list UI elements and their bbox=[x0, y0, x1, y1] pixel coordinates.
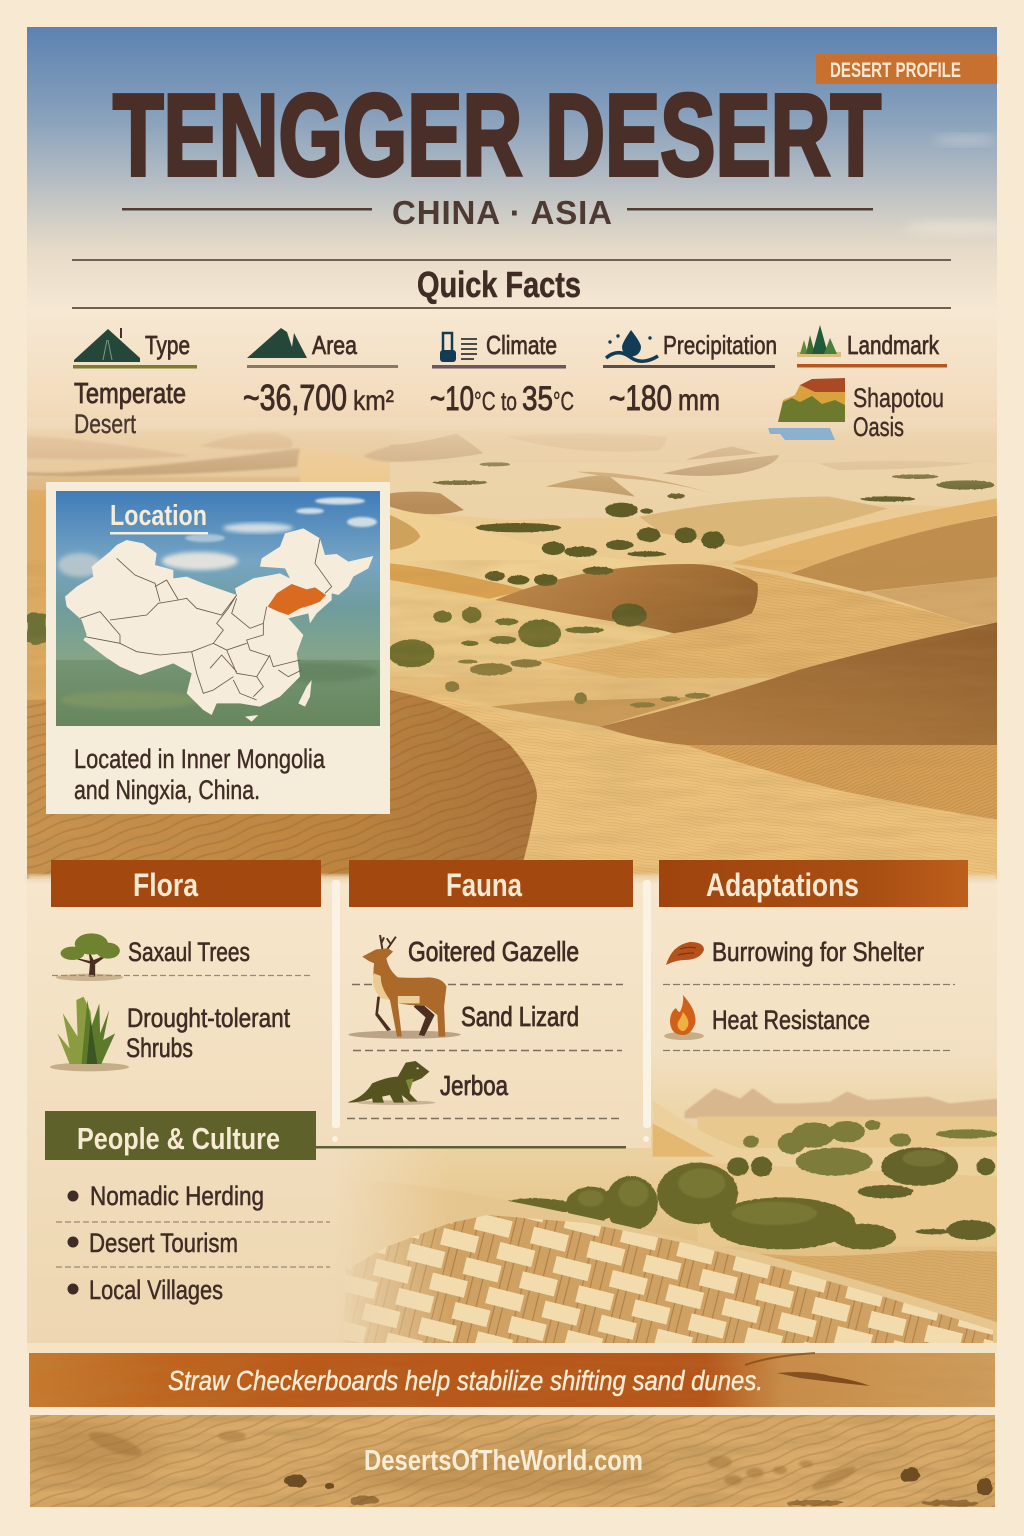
sky and haze backdrop bbox=[27, 27, 1015, 457]
badge: desert profile bbox=[816, 54, 997, 84]
straw checkerboard bbox=[343, 1215, 993, 1343]
panel: location: and Ningxia, China. bbox=[74, 775, 260, 805]
list: culture items: Nomadic Herding bbox=[90, 1181, 264, 1211]
panel: fauna: Fauna bbox=[446, 867, 522, 903]
fact: climate: 35 bbox=[522, 380, 553, 418]
panel: adaptations: Burrowing for Shelter bbox=[712, 937, 924, 967]
lower left dark dune bbox=[27, 690, 537, 880]
divider bars bbox=[332, 880, 651, 1142]
panel: fauna: Sand Lizard bbox=[461, 1001, 579, 1032]
lower panels backdrop bbox=[27, 875, 997, 1349]
fact: type bbox=[73, 328, 197, 439]
list: culture items: Desert Tourism bbox=[89, 1228, 238, 1258]
bush highlights bbox=[578, 1150, 945, 1225]
trees and bushes bbox=[497, 1120, 997, 1249]
subtitle: CHINA · ASIA bbox=[392, 194, 612, 231]
lower right landscape with checkerboard bbox=[344, 1074, 997, 1343]
icon: flame bbox=[664, 995, 704, 1040]
fact: landmark: Landmark bbox=[847, 330, 940, 360]
shrubs scattered bbox=[388, 462, 995, 708]
fact: type: Desert bbox=[74, 409, 136, 439]
panel: fauna: Jerboa bbox=[440, 1070, 508, 1101]
list: culture items bbox=[56, 1181, 330, 1305]
fact: precipitation bbox=[603, 330, 777, 418]
icon: shrub bbox=[50, 997, 129, 1071]
panel: location bbox=[46, 482, 390, 814]
icon: burrow bbox=[666, 942, 704, 965]
heading: quick facts: Quick Facts bbox=[417, 264, 581, 305]
icon: gazelle bbox=[348, 935, 461, 1039]
fact: area: ~36,700 bbox=[243, 377, 347, 418]
icon: saxaul tree bbox=[56, 933, 123, 981]
panel: adaptations: Adaptations bbox=[706, 867, 859, 903]
traced right dunes bbox=[386, 430, 1001, 880]
caption: straw checkerboards: Straw Checkerboards help stabilize shifting sand dunes. bbox=[168, 1365, 763, 1396]
footer: website: DesertsOfTheWorld.com bbox=[364, 1445, 643, 1477]
panel: people and culture: People & Culture bbox=[77, 1121, 280, 1156]
fact: precipitation: ~180 bbox=[609, 379, 672, 418]
fact: climate bbox=[430, 330, 574, 418]
fact: area: Area bbox=[312, 330, 357, 360]
fact: landmark: Oasis bbox=[853, 412, 904, 442]
fact: area bbox=[243, 328, 398, 418]
distant haze overlay bbox=[27, 418, 997, 505]
fact: climate: ~10 bbox=[430, 380, 474, 418]
icon: thermometer bbox=[440, 333, 477, 362]
icon: jerboa bbox=[348, 1061, 435, 1105]
fact: type: Type bbox=[145, 330, 190, 360]
sand grain texture bbox=[27, 560, 997, 880]
fact: climate: Climate bbox=[486, 330, 557, 360]
panel: location: Located in Inner Mongolia bbox=[74, 744, 326, 774]
panel: flora: Shrubs bbox=[126, 1033, 193, 1063]
fact: area: km² bbox=[353, 385, 394, 416]
left distant dunes bbox=[27, 432, 390, 490]
panel: fauna: Goitered Gazelle bbox=[408, 936, 579, 967]
foreground dune bbox=[496, 1200, 997, 1343]
fact: climate: °C bbox=[553, 386, 574, 416]
fact: precipitation: mm bbox=[678, 384, 720, 417]
icon: water drop and wave bbox=[606, 330, 658, 361]
icon: oasis bbox=[768, 378, 845, 440]
icon: tent bbox=[74, 328, 140, 362]
panel: flora bbox=[50, 860, 321, 1071]
orange caption band background bbox=[27, 1343, 997, 1407]
panel: adaptations: Heat Resistance bbox=[712, 1005, 870, 1035]
panel: adaptations bbox=[659, 860, 968, 1050]
list: culture items: Local Villages bbox=[89, 1275, 223, 1305]
fact: landmark: Shapotou bbox=[853, 383, 944, 413]
panel: location: Location bbox=[110, 500, 207, 532]
hero dunes landscape bbox=[20, 418, 1001, 880]
footer sand background bbox=[20, 1415, 995, 1507]
panel: flora: Flora bbox=[133, 867, 198, 903]
panel: flora: Drought-tolerant bbox=[127, 1003, 290, 1033]
icon: grass bbox=[797, 325, 841, 357]
icon: mountain bbox=[247, 328, 307, 358]
fact: climate: °C to bbox=[474, 386, 517, 416]
map of China bbox=[65, 528, 373, 722]
fact: precipitation: Precipitation bbox=[663, 330, 777, 360]
fact: type: Temperate bbox=[74, 378, 186, 410]
fact: landmark bbox=[768, 325, 947, 442]
panel: flora: Saxaul Trees bbox=[128, 937, 250, 967]
panel: fauna bbox=[347, 860, 633, 1118]
map background bbox=[56, 491, 380, 726]
badge: desert profile: DESERT PROFILE bbox=[830, 59, 961, 82]
panel: people and culture bbox=[45, 1111, 626, 1305]
